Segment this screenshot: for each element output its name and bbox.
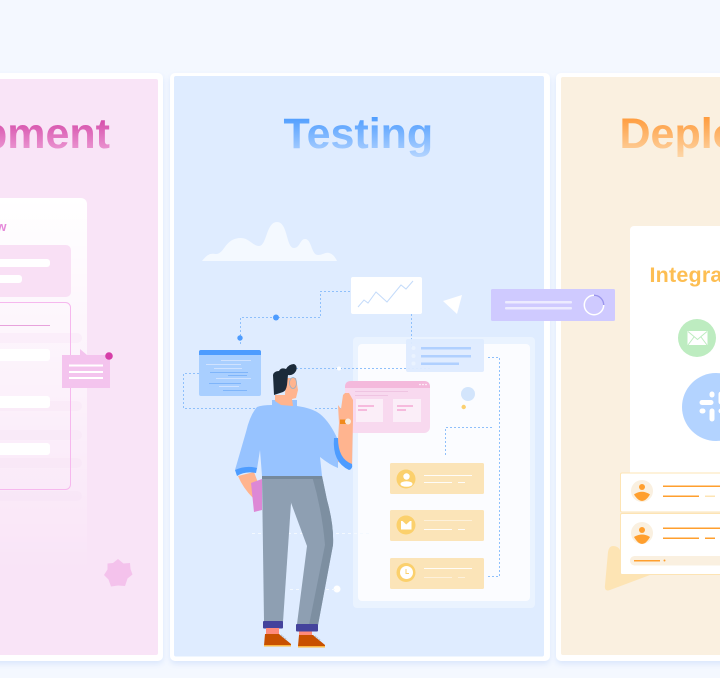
paper plane [443, 295, 462, 314]
text window card [199, 350, 261, 396]
forearm and hand [338, 393, 353, 465]
figure: man with glasses [235, 364, 353, 648]
icon: email [678, 319, 716, 357]
faint dashes [252, 534, 372, 590]
watch [340, 418, 351, 424]
notification card 1 [620, 473, 720, 512]
heading: Testing: Testing [284, 110, 433, 158]
pink browser window [345, 381, 430, 433]
socks [266, 628, 312, 636]
booklet [251, 479, 262, 512]
glasses [290, 378, 296, 388]
left hand [238, 472, 260, 498]
app backdrop panel [353, 337, 535, 608]
floating status bar [491, 289, 615, 321]
shirt [235, 400, 338, 476]
shoes [264, 634, 325, 648]
status dots [461, 387, 475, 409]
right leg [283, 476, 333, 625]
faint list stripes [0, 333, 82, 501]
pink summary block [0, 245, 71, 297]
yellow speech tail [605, 546, 650, 590]
hair [273, 364, 297, 395]
icon: note bubble [62, 349, 113, 388]
panel: development [0, 73, 163, 661]
dotted connectors [184, 292, 500, 576]
neck and face [275, 378, 298, 406]
belt shadow [262, 476, 322, 479]
notification card 2 [620, 514, 720, 574]
icon: badge star [104, 559, 132, 586]
integrations card [630, 226, 720, 496]
connector nodes [237, 314, 341, 592]
contact card 1 [390, 463, 484, 494]
icon: slack [682, 373, 720, 441]
cloud [202, 222, 337, 261]
workflow card [0, 198, 87, 573]
contact card 2 [390, 510, 484, 541]
panel: testing [170, 73, 550, 661]
line chart card [351, 277, 422, 314]
floating list card [406, 339, 484, 372]
panel: deployment [556, 73, 720, 661]
trouser cuffs [263, 621, 318, 632]
shirt cuffs [235, 438, 352, 476]
left leg [262, 478, 291, 622]
outlined form box [0, 302, 70, 490]
contact card 3 [390, 558, 484, 589]
